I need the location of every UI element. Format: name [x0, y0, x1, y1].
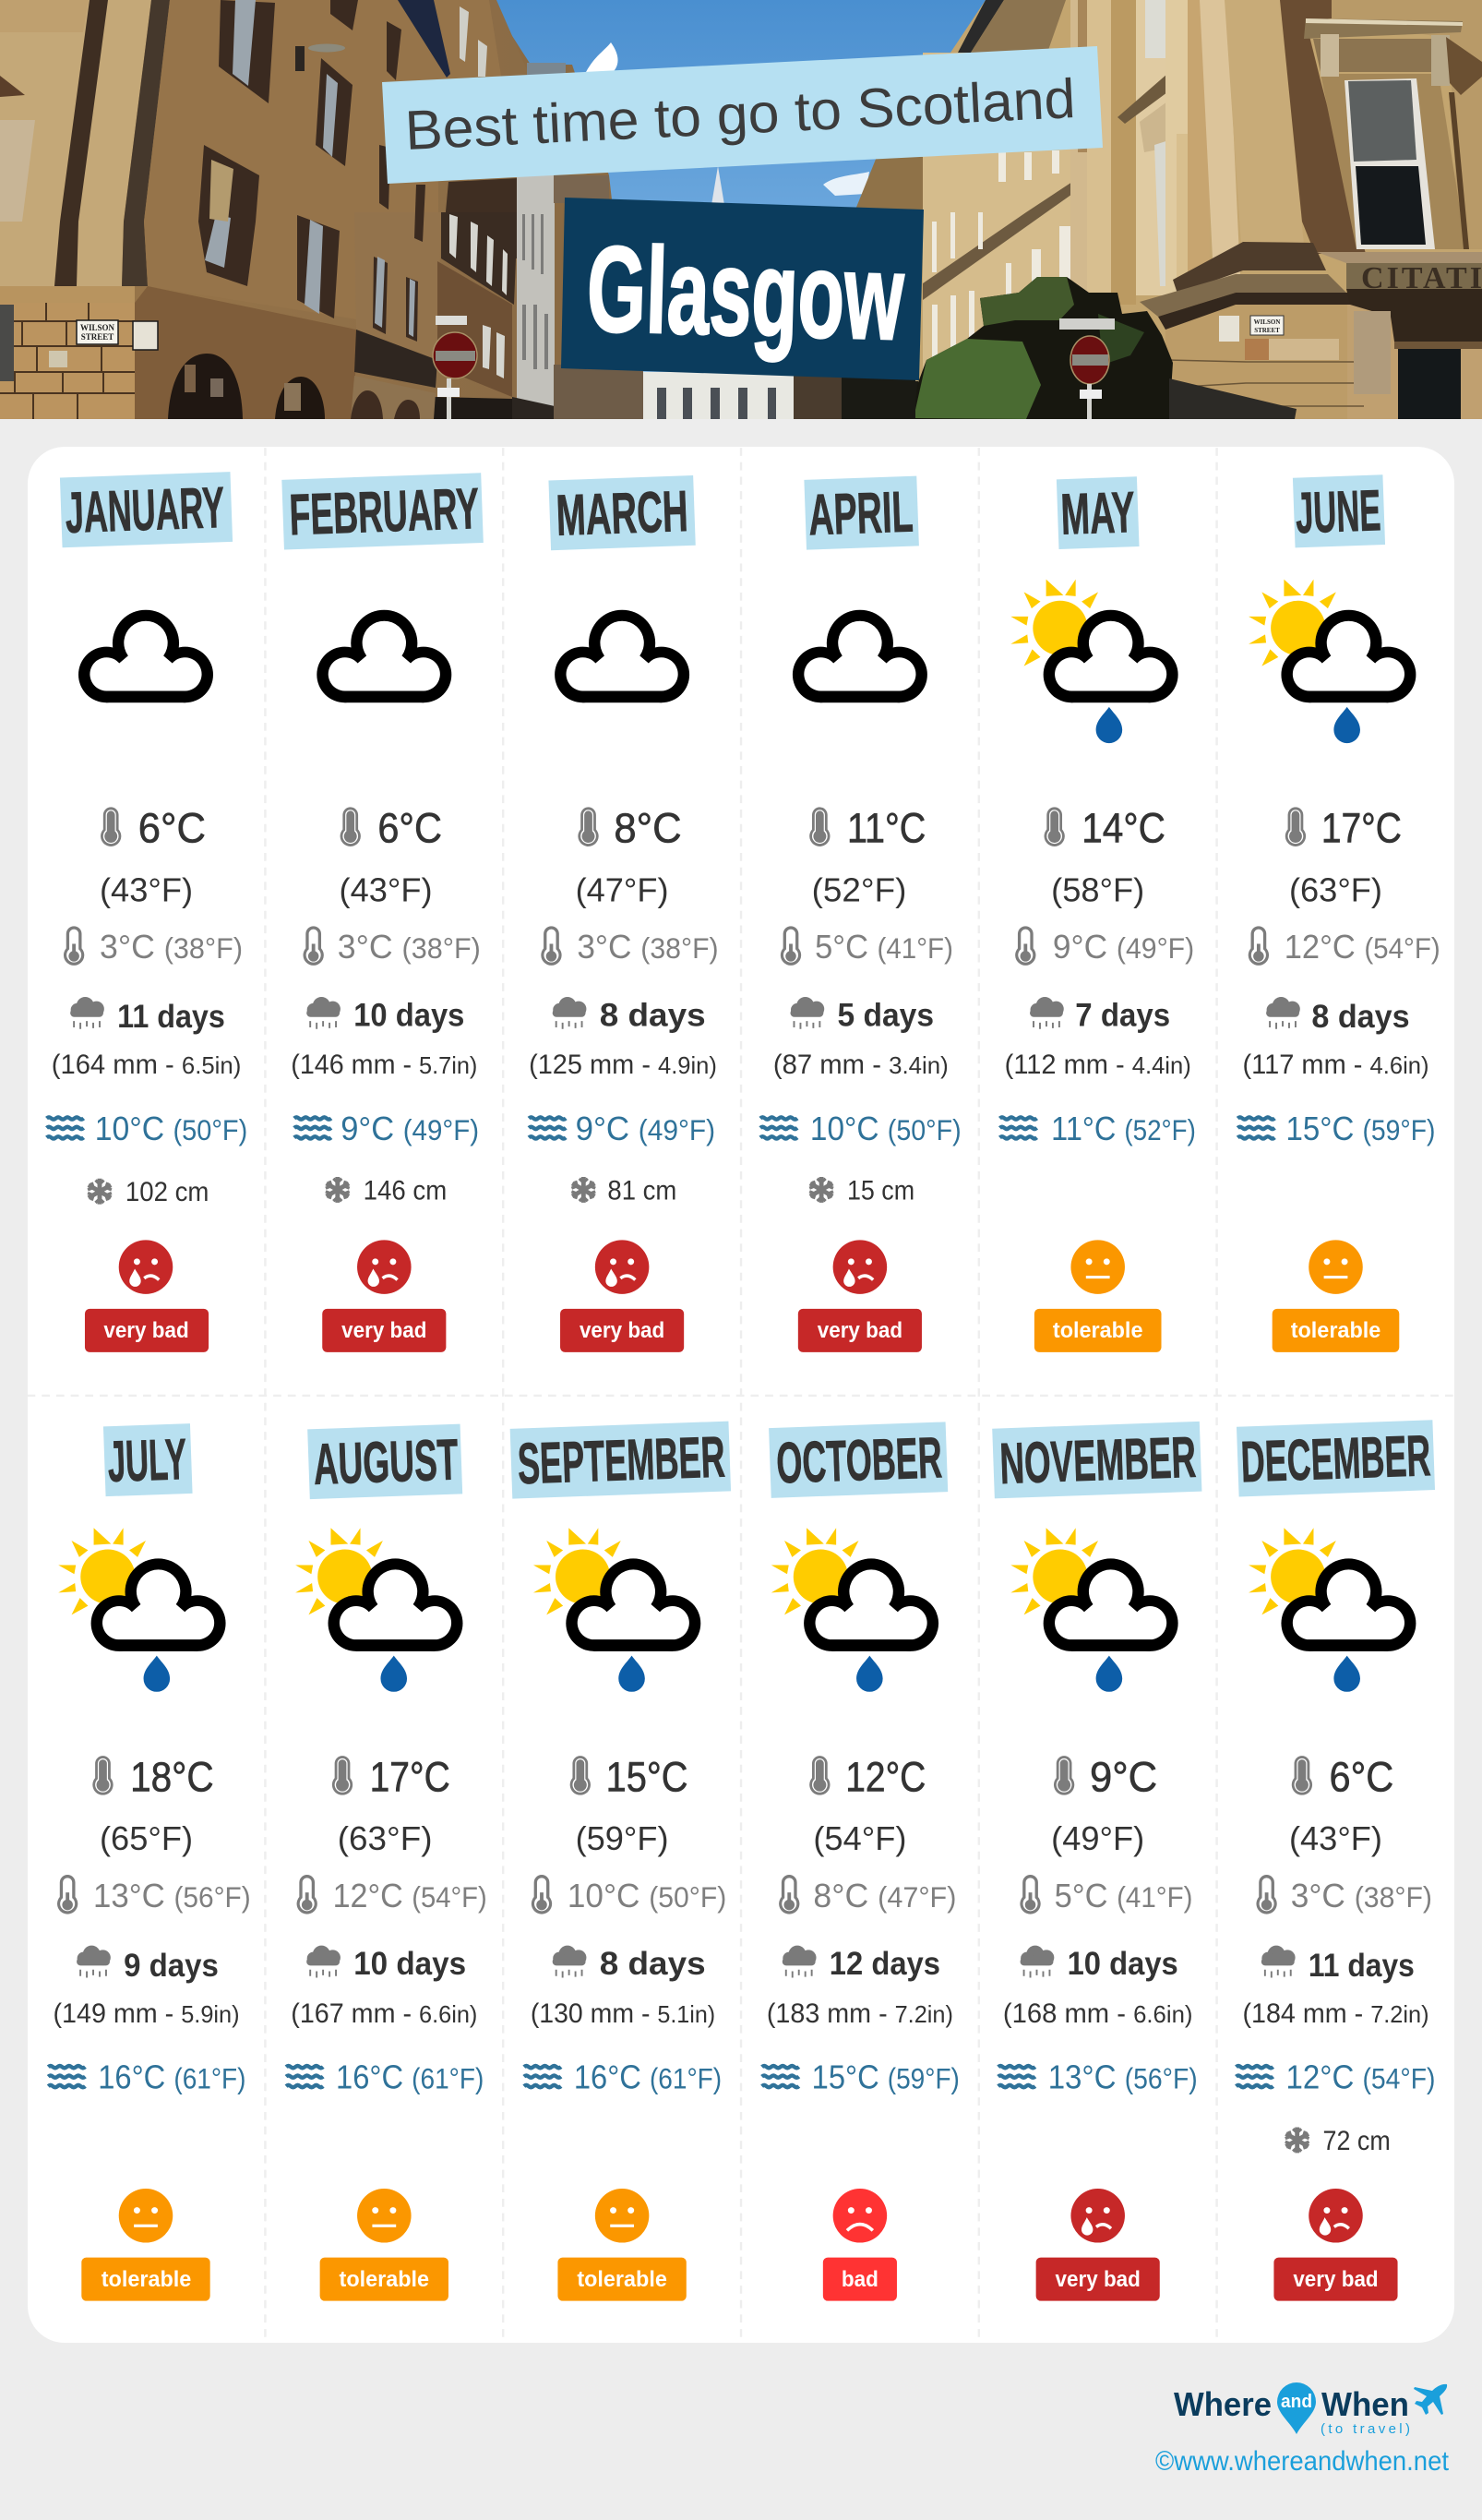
mean temperature: 18°C [130, 1753, 214, 1800]
rating badge: tolerable [577, 2267, 667, 2292]
rain days [77, 1946, 219, 1984]
mean temperature: 6°C [138, 805, 206, 852]
rainfall: (167 mm - 6.6in) [291, 1998, 477, 2029]
rating badge [560, 1309, 684, 1352]
panel: February [281, 473, 484, 1352]
rating badge: tolerable [1291, 1318, 1380, 1343]
rain days: 5 days [838, 997, 934, 1033]
rating badge [823, 2258, 897, 2301]
rating badge [557, 2258, 687, 2301]
heading: September [510, 1422, 731, 1499]
heading: June: JUNE [1295, 478, 1381, 546]
mean temperature: 14°C [1082, 805, 1165, 852]
hero photo: Glasgow street [0, 0, 1482, 419]
mean temperature: 8°C [614, 805, 682, 852]
low temperature: 12°C (54°F) [333, 1877, 487, 1914]
rain days [783, 1946, 940, 1982]
rain days: 8 days [1311, 999, 1410, 1035]
rainfall: (146 mm - 5.7in) [291, 1050, 477, 1080]
icon: sun, cloud and rain [58, 1528, 226, 1692]
mean temperature fahrenheit: (63°F) [338, 1819, 433, 1857]
heading: October [769, 1422, 948, 1498]
panel: September [510, 1422, 731, 2301]
heading: February: FEBRUARY [288, 476, 480, 547]
rain days [1021, 1946, 1178, 1982]
heading: November: NOVEMBER [998, 1425, 1197, 1496]
logo: Where and When to travel: When [1321, 2385, 1409, 2423]
mean temperature [809, 805, 926, 852]
heading: October: OCTOBER [775, 1425, 943, 1495]
sea temperature: 13°C (56°F) [1048, 2058, 1198, 2096]
mean temperature: 6°C [377, 805, 442, 852]
low temperature: 13°C (56°F) [93, 1877, 251, 1914]
rain days [306, 997, 464, 1033]
rainfall: (168 mm - 6.6in) [1003, 1998, 1192, 2029]
mean temperature [341, 805, 442, 852]
snow depth: 15 cm [847, 1175, 914, 1206]
snow depth: 72 cm [1323, 2126, 1391, 2156]
snow depth: 146 cm [364, 1175, 447, 1206]
heading: February [281, 473, 484, 550]
rating badge [81, 2258, 210, 2301]
low temperature: 12°C (54°F) [1285, 928, 1440, 966]
sea temperature: 9°C (49°F) [576, 1110, 715, 1147]
panel: October [762, 1422, 960, 2301]
heading: April: APRIL [807, 480, 914, 547]
rating face [833, 1240, 887, 1294]
mean temperature [570, 1753, 688, 1800]
hero photo: Glasgow street: WILSON [80, 323, 115, 332]
rainfall: (87 mm - 3.4in) [773, 1050, 949, 1080]
icon: sun, cloud and rain [1010, 1528, 1178, 1692]
icon: cloud [78, 610, 213, 702]
mean temperature [92, 1753, 214, 1800]
panel: June [1237, 474, 1440, 1352]
panel: August [286, 1424, 487, 2301]
low temperature: 9°C (49°F) [1053, 928, 1194, 966]
snow depth [1285, 2126, 1391, 2156]
rainfall: (112 mm - 4.4in) [1005, 1050, 1191, 1080]
rain days [70, 997, 225, 1035]
low temperature: 8°C (47°F) [813, 1877, 956, 1914]
icon: cloud [555, 610, 689, 702]
rain days [306, 1946, 466, 1982]
rain days: 10 days [353, 997, 464, 1033]
rating badge: tolerable [102, 2267, 191, 2292]
hero photo: Glasgow street: WILSON [1254, 318, 1280, 326]
rain days [1261, 1946, 1415, 1984]
rating badge: very bad [1056, 2267, 1141, 2292]
title banner: Glasgow [561, 198, 924, 380]
hero photo: Glasgow street: STREET [81, 332, 114, 342]
icon: sun, cloud and rain [771, 1528, 938, 1692]
rainfall: (117 mm - 4.6in) [1242, 1050, 1429, 1080]
rating badge [1273, 1309, 1399, 1352]
rainfall: (130 mm - 5.1in) [531, 1998, 715, 2029]
mean temperature: 15°C [606, 1753, 688, 1800]
sea temperature: 9°C (49°F) [341, 1110, 479, 1147]
rating badge [1036, 2258, 1160, 2301]
hero photo: Glasgow street: STREET [1254, 327, 1280, 334]
sea temperature: 15°C (59°F) [812, 2058, 960, 2096]
rating face [119, 2189, 173, 2243]
mean temperature fahrenheit: (59°F) [576, 1819, 669, 1857]
mean temperature: 9°C [1090, 1753, 1157, 1800]
rating badge [1273, 2258, 1398, 2301]
rain days [553, 997, 706, 1033]
rating face [119, 1240, 173, 1294]
panel: November [992, 1422, 1201, 2301]
icon: sun, cloud and rain [295, 1528, 462, 1692]
mean temperature [1045, 805, 1165, 852]
rain days: 11 days [117, 999, 225, 1035]
rating badge: very bad [1293, 2267, 1379, 2292]
icon: sun, cloud and rain [1010, 580, 1178, 743]
heading: June [1293, 474, 1385, 547]
title banner: Best time to go to Scotland: Best time to go to Scotland [403, 67, 1077, 162]
rainfall: (125 mm - 4.9in) [529, 1050, 717, 1080]
heading: September: SEPTEMBER [517, 1424, 726, 1496]
sea temperature: 10°C (50°F) [95, 1110, 247, 1147]
mean temperature [101, 805, 206, 852]
rain days [1266, 997, 1410, 1035]
sea temperature: 16°C (61°F) [574, 2058, 722, 2096]
logo: Where and When to travel: and [1281, 2392, 1312, 2412]
mean temperature [1054, 1753, 1157, 1800]
rating badge: bad [842, 2267, 878, 2292]
heading: August [307, 1424, 462, 1499]
rating face [1309, 1240, 1363, 1294]
rating badge: very bad [818, 1318, 902, 1343]
mean temperature fahrenheit: (47°F) [576, 870, 669, 908]
low temperature: 3°C (38°F) [100, 928, 243, 966]
mean temperature: 12°C [845, 1753, 926, 1800]
icon: cloud [793, 610, 927, 702]
rain days [553, 1946, 706, 1982]
heading: April [804, 476, 919, 550]
rating face [357, 2189, 412, 2243]
low temperature: 3°C (38°F) [577, 928, 719, 966]
panel: January [47, 472, 247, 1352]
icon: sun, cloud and rain [1249, 1528, 1416, 1692]
mean temperature: 6°C [1330, 1753, 1393, 1800]
logo: Where and When to travel: Where [1174, 2385, 1272, 2423]
rating face [1070, 2189, 1125, 2243]
heading: August: AUGUST [313, 1427, 460, 1497]
rating face [833, 2189, 887, 2243]
title banner: Glasgow: Glasgow [585, 221, 905, 366]
mean temperature [578, 805, 682, 852]
sea temperature: 16°C (61°F) [98, 2058, 246, 2096]
rain days: 8 days [600, 997, 706, 1033]
mean temperature [1292, 1753, 1393, 1800]
mean temperature fahrenheit: (52°F) [812, 870, 906, 908]
rain days [790, 997, 934, 1033]
main white card [28, 447, 1454, 2343]
rain days [1030, 997, 1170, 1033]
rainfall: (149 mm - 5.9in) [53, 1998, 240, 2029]
rating badge [85, 1309, 209, 1352]
low temperature: 3°C (38°F) [338, 928, 481, 966]
months grid in scaled units [28, 448, 1454, 2343]
icon: cloud [317, 610, 451, 702]
heading: May [1057, 476, 1140, 549]
low temperature: 10°C (50°F) [568, 1877, 726, 1914]
mean temperature fahrenheit: (63°F) [1289, 870, 1382, 908]
snow depth [326, 1175, 447, 1206]
hero photo: Glasgow street: CITATI [1361, 261, 1482, 295]
rating face [595, 2189, 649, 2243]
heading: January: JANUARY [65, 475, 225, 546]
rating badge [798, 1309, 922, 1352]
mean temperature fahrenheit: (43°F) [340, 870, 433, 908]
heading: May: MAY [1059, 480, 1136, 547]
second row of months [48, 1420, 1435, 2301]
rating badge [320, 2258, 448, 2301]
panel: May [999, 476, 1196, 1352]
rain days: 7 days [1075, 997, 1170, 1033]
heading: March [548, 475, 696, 550]
mean temperature [809, 1753, 926, 1800]
snow depth [88, 1177, 209, 1207]
rain days: 11 days [1309, 1948, 1415, 1984]
sea temperature: 15°C (59°F) [1285, 1110, 1435, 1147]
rating face [595, 1240, 649, 1294]
heading: January [60, 472, 233, 547]
mean temperature fahrenheit: (43°F) [1289, 1819, 1382, 1857]
snow depth: 81 cm [607, 1175, 676, 1206]
rain days: 12 days [830, 1946, 940, 1982]
low temperature: 5°C (41°F) [1055, 1877, 1192, 1914]
mean temperature: 11°C [847, 805, 926, 852]
mean temperature fahrenheit: (49°F) [1051, 1819, 1144, 1857]
rating badge [1034, 1309, 1162, 1352]
rain days: 8 days [600, 1946, 706, 1982]
rainfall: (184 mm - 7.2in) [1242, 1998, 1429, 2029]
rating badge: very bad [103, 1318, 189, 1343]
rating face [357, 1240, 412, 1294]
mean temperature fahrenheit: (43°F) [100, 870, 193, 908]
website credit: ©www.whereandwhen.net [1155, 2446, 1450, 2477]
mean temperature: 17°C [370, 1753, 450, 1800]
rating badge: very bad [341, 1318, 426, 1343]
rainfall: (183 mm - 7.2in) [767, 1998, 953, 2029]
rain days: 10 days [1068, 1946, 1178, 1982]
mean temperature [1285, 805, 1402, 852]
panel: April [760, 476, 962, 1352]
panel: July [48, 1423, 251, 2301]
logo: Where and When to travel [1174, 2382, 1447, 2437]
snow depth [571, 1175, 676, 1206]
panel: December [1236, 1420, 1435, 2301]
logo: Where and When to travel: (to travel) [1321, 2421, 1410, 2437]
snow depth [809, 1175, 914, 1206]
rainfall: (164 mm - 6.5in) [52, 1050, 241, 1080]
mean temperature [332, 1753, 450, 1800]
heading: November [992, 1422, 1201, 1498]
icon: sun, cloud and rain [533, 1528, 700, 1692]
title banner: Best time to go to Scotland [382, 46, 1103, 184]
sea temperature: 16°C (61°F) [336, 2058, 484, 2096]
rating badge [322, 1309, 446, 1352]
rating badge: tolerable [1053, 1318, 1142, 1343]
mean temperature fahrenheit: (54°F) [813, 1819, 906, 1857]
heading: July: JULY [107, 1427, 187, 1494]
sea temperature: 11°C (52°F) [1051, 1110, 1196, 1147]
snow depth: 102 cm [125, 1177, 209, 1207]
rating face [1309, 2189, 1363, 2243]
rain days: 10 days [353, 1946, 466, 1982]
rating badge: tolerable [340, 2267, 429, 2292]
low temperature: 3°C (38°F) [1291, 1877, 1432, 1914]
mean temperature: 17°C [1321, 805, 1402, 852]
mean temperature fahrenheit: (58°F) [1051, 870, 1144, 908]
panel: March [529, 475, 719, 1352]
rating face [1070, 1240, 1125, 1294]
sea temperature: 10°C (50°F) [810, 1110, 962, 1147]
low temperature: 5°C (41°F) [815, 928, 953, 966]
mean temperature fahrenheit: (65°F) [100, 1819, 193, 1857]
rating badge: very bad [580, 1318, 664, 1343]
rain days: 9 days [124, 1948, 219, 1984]
sea temperature: 12°C (54°F) [1285, 2058, 1435, 2096]
heading: July [103, 1423, 193, 1496]
icon: sun, cloud and rain [1249, 580, 1416, 743]
heading: March: MARCH [556, 479, 689, 548]
